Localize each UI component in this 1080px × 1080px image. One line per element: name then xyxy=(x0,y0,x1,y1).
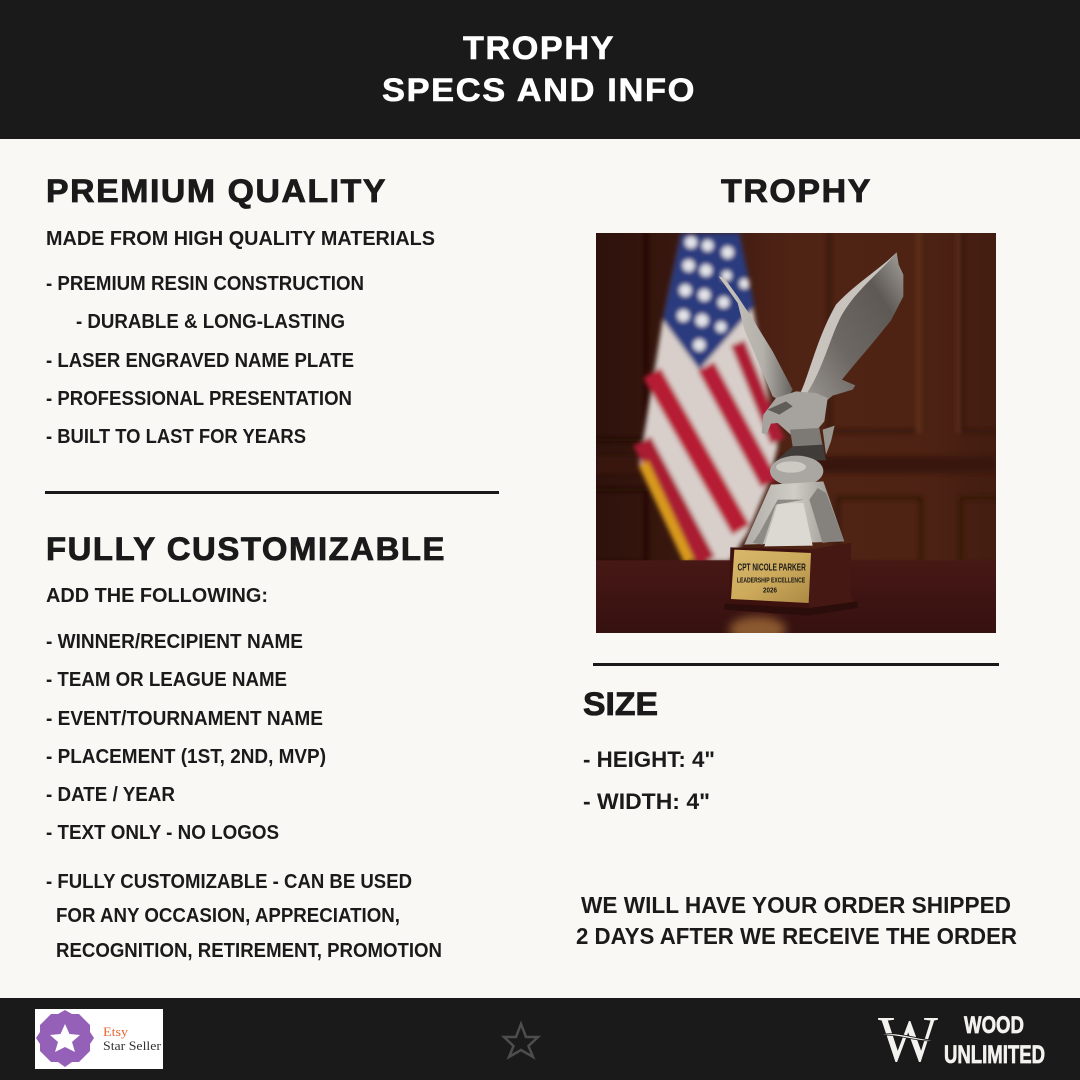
photo: eagle trophy xyxy=(596,233,996,633)
panel: premium quality xyxy=(46,173,435,448)
legs and talons xyxy=(790,428,823,446)
text block: customization list: - EVENT/TOURNAMENT NAME xyxy=(46,708,323,730)
heading: size: SIZE xyxy=(583,686,658,722)
icon: star xyxy=(504,1024,538,1057)
wood base xyxy=(724,543,858,616)
text block: dimensions xyxy=(583,747,715,814)
text block: premium quality list: - PREMIUM RESIN CONSTRUCTION xyxy=(46,273,364,295)
text block: premium quality list: MADE FROM HIGH QUALITY MATERIALS xyxy=(46,228,435,250)
name plate: 2026 xyxy=(763,588,777,595)
name plate: CPT NICOLE PARKER xyxy=(737,562,806,573)
text block: customization list: RECOGNITION, RETIREMENT, PROMOTION xyxy=(56,940,442,962)
heading: premium quality: PREMIUM QUALITY xyxy=(46,173,387,209)
text block: customization list: - WINNER/RECIPIENT NAME xyxy=(46,631,303,653)
text block: customization list: - TEXT ONLY - NO LOGOS xyxy=(46,822,279,844)
body and head xyxy=(762,391,828,436)
text block: premium quality list: - DURABLE & LONG-LASTING xyxy=(76,311,345,333)
text block: dimensions: - WIDTH: 4" xyxy=(583,789,710,814)
text block: premium quality list: - PROFESSIONAL PRESENTATION xyxy=(46,388,352,410)
panel: fully customizable xyxy=(46,531,446,962)
eagle xyxy=(719,252,903,546)
badge: etsy star seller: Star Seller xyxy=(103,1038,162,1053)
pedestal xyxy=(744,481,844,545)
callout: shipping note: 2 DAYS AFTER WE RECEIVE THE ORDER xyxy=(576,923,1017,949)
badge: etsy star seller: Etsy xyxy=(103,1024,129,1039)
text block: customization list xyxy=(46,585,442,962)
text block: premium quality list: - LASER ENGRAVED NAME PLATE xyxy=(46,350,354,372)
heading: trophy: TROPHY xyxy=(721,173,872,209)
header title xyxy=(382,30,696,108)
text block: premium quality list: - BUILT TO LAST FOR YEARS xyxy=(46,426,306,448)
logo: wood unlimited: WOOD xyxy=(964,1012,1024,1039)
wood wall xyxy=(596,233,996,566)
header title: TROPHY xyxy=(463,30,615,66)
globe xyxy=(770,456,823,486)
badge: etsy star seller xyxy=(35,1009,163,1069)
header band xyxy=(0,0,1080,139)
callout: shipping note xyxy=(576,892,1017,949)
right wing xyxy=(799,252,903,410)
text block: customization list: - PLACEMENT (1ST, 2ND, MVP) xyxy=(46,746,326,768)
logo: wood unlimited: W xyxy=(878,1003,939,1076)
panel: size xyxy=(583,686,715,814)
header title: SPECS AND INFO xyxy=(382,72,696,108)
logo: wood unlimited xyxy=(878,1003,1045,1076)
footer band xyxy=(0,998,1080,1080)
left wing xyxy=(719,276,793,403)
text block: customization list: - TEAM OR LEAGUE NAME xyxy=(46,669,287,691)
heading: fully customizable: FULLY CUSTOMIZABLE xyxy=(46,531,446,567)
text block: customization list: FOR ANY OCCASION, APPRECIATION, xyxy=(56,905,400,927)
text block: customization list: ADD THE FOLLOWING: xyxy=(46,585,268,607)
text block: customization list: - FULLY CUSTOMIZABLE - CAN BE USED xyxy=(46,871,412,893)
name plate xyxy=(731,550,811,603)
callout: shipping note: WE WILL HAVE YOUR ORDER SHIPPED xyxy=(581,892,1011,918)
text block: premium quality list xyxy=(46,228,435,448)
text block: dimensions: - HEIGHT: 4" xyxy=(583,747,715,772)
logo: wood unlimited: UNLIMITED xyxy=(944,1041,1045,1069)
name plate: LEADERSHIP EXCELLENCE xyxy=(737,576,805,585)
table xyxy=(596,560,996,633)
flag xyxy=(639,233,778,561)
text block: customization list: - DATE / YEAR xyxy=(46,784,176,806)
